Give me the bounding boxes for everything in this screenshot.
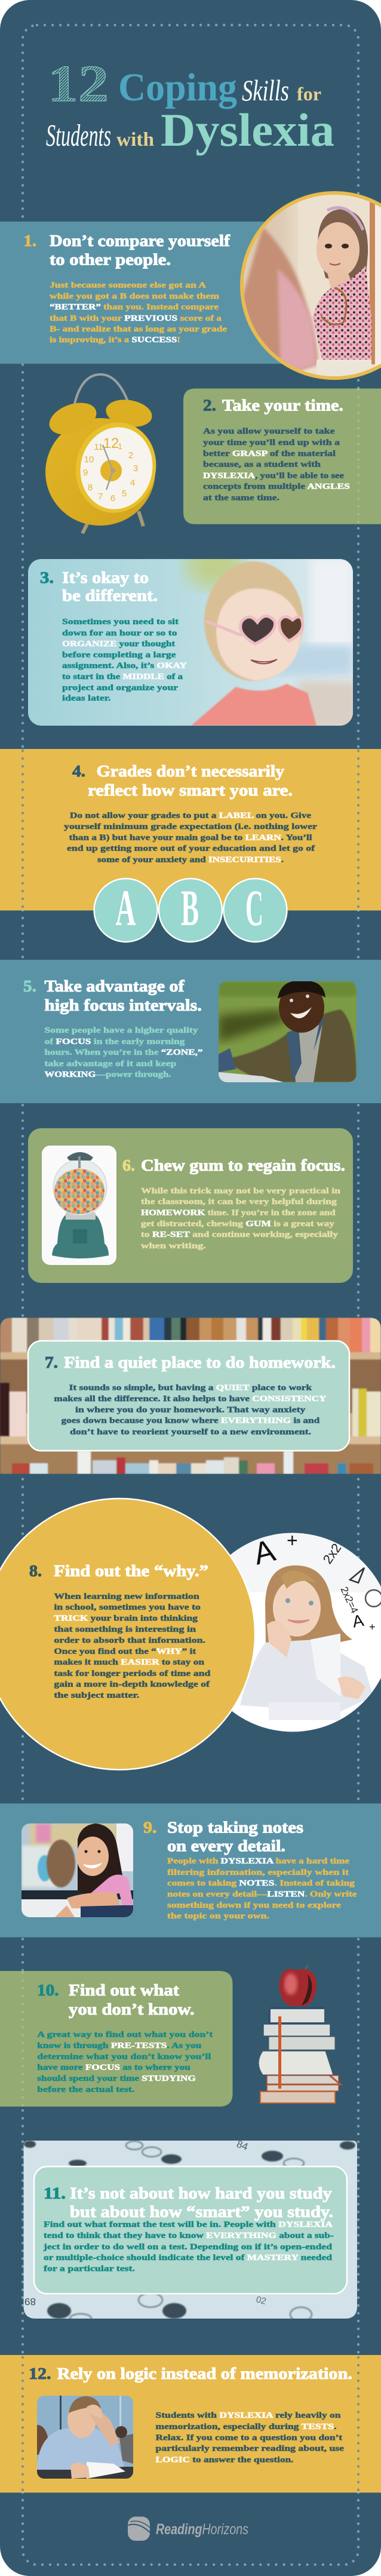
tip 11 heading: It’s not about how hard you study <box>70 2184 332 2202</box>
title <box>46 54 334 156</box>
tip 5 text: WORKING —power through. <box>44 1070 171 1079</box>
tip 12 heading: Rely on logic instead of memorization. <box>57 2365 352 2382</box>
tip 7 text: makes all the difference. It also helps to have CONSISTENCY <box>54 1394 327 1403</box>
tip 9 text: comes to taking NOTES . Instead of taking <box>167 1878 355 1887</box>
tip 7 card <box>28 1341 349 1451</box>
book stack <box>259 2007 340 2103</box>
clock numbers: 10 <box>84 455 94 465</box>
grade circle B <box>159 879 222 942</box>
panel: tip 6 <box>28 1128 353 1283</box>
tip 10 heading <box>69 1981 195 2018</box>
panel: tip 4 <box>0 749 381 942</box>
photo: boy taking a test <box>37 2396 133 2479</box>
tip 3 text: Sometimes you need to sit <box>62 617 179 626</box>
tip 5 heading: high focus intervals. <box>44 996 202 1014</box>
tip 4 text: some of your anxiety and INSECURITIES . <box>97 855 284 864</box>
tip 1 text: is improving, it’s a SUCCESS ! <box>50 335 180 344</box>
tip 2 text: DYSLEXIA , you’ll be able to see <box>203 471 344 480</box>
clock numbers: 9 <box>83 468 88 478</box>
title number 12: 12 <box>48 54 109 112</box>
sheet numbers: 02 <box>255 2294 267 2307</box>
tip 8 text: When learning new information <box>54 1592 199 1601</box>
tip 10 text <box>37 2030 213 2094</box>
clock numbers: 2 <box>128 450 133 460</box>
tip 12 text: particularly remember reading about, use <box>155 2444 344 2453</box>
tip 9 text: filtering information, especially when it <box>167 1868 349 1877</box>
tip 10 text: A great way to find out what you don’t <box>37 2030 213 2039</box>
tip 3 heading: It’s okay to <box>62 569 149 587</box>
panel: tip 9 <box>0 1804 381 1938</box>
tip 6 text: to RE-SET and continue working, especially <box>141 1230 338 1239</box>
title word with: with <box>116 129 154 151</box>
tip 7 text <box>54 1383 327 1436</box>
sheet numbers: 84 <box>235 2138 250 2153</box>
photo: smiling boy on grass <box>219 981 357 1082</box>
tip 1 text <box>50 281 227 344</box>
tip 11 number: 11. <box>44 2184 66 2202</box>
tip 11 text: tend to think that they have to know EVERYTHING about a sub- <box>44 2231 334 2240</box>
tip 6 text <box>141 1186 341 1250</box>
tip 4 heading: reflect how smart you are. <box>88 781 293 799</box>
tip 1 text: that B with your PREVIOUS score of a <box>50 314 222 323</box>
tip 8 text: in school, sometimes you have to <box>54 1602 201 1611</box>
tip 8 text: TRICK your brain into thinking <box>54 1614 198 1623</box>
doodle text: A <box>351 1611 365 1631</box>
tip 6 number: 6. <box>122 1156 135 1174</box>
tip 3 text: down for an hour or so to <box>62 628 177 637</box>
tip 2 text <box>203 426 350 502</box>
tip 6 text: get distracted, chewing GUM is a great way <box>141 1219 334 1228</box>
tip 7 text: in where you do your homework. That way anxiety <box>75 1405 306 1414</box>
tip 9 text: People with DYSLEXIA have a hard time <box>167 1856 349 1865</box>
tip 3 heading: be different. <box>62 587 158 604</box>
tip 2 text: at the same time. <box>203 493 279 502</box>
tip 11 text: ject in order to do well on a test. Depending on if it’s open-ended <box>43 2242 333 2251</box>
tip 8 text: Once you find out the “ WHY ” it <box>54 1647 196 1656</box>
clock numbers: 5 <box>122 489 127 499</box>
tip 4 text: yourself minimum grade expectation (i.e. nothing lower <box>64 822 317 831</box>
tip 6 heading: Chew gum to regain focus. <box>141 1156 345 1174</box>
tip 8 number: 8. <box>29 1562 42 1580</box>
tip 3 text: to start in the MIDDLE of a <box>62 672 183 681</box>
clock numbers: 11 <box>94 442 103 452</box>
logo: Reading Horizons <box>128 2517 248 2541</box>
title word Coping: Coping <box>118 66 237 109</box>
tip 5 heading <box>44 977 202 1014</box>
tip 3 text: assignment. Also, it’s OKAY <box>62 661 187 670</box>
tip 2 text: concepts from multiple ANGLES <box>203 482 350 491</box>
tip 3 text: before completing a large <box>62 650 176 659</box>
photo: answer sheet <box>24 2138 357 2323</box>
tip 9 heading: Stop taking notes <box>167 1818 303 1836</box>
icon: alarm clock <box>38 374 164 533</box>
tip 9 text: something down if you need to explore <box>167 1900 341 1909</box>
tip 7 text: It sounds so simple, but having a QUIET place to work <box>69 1383 312 1392</box>
logo wordmark: ReadingHorizons <box>156 2521 248 2538</box>
tip 7 text: don’t have to reorient yourself to a new environment. <box>70 1427 311 1436</box>
doodle text: + <box>369 1621 376 1633</box>
tip 4 heading <box>88 762 293 799</box>
tip 3 text <box>62 617 187 702</box>
tip 11 heading: but about how “smart” you study. <box>70 2203 333 2221</box>
panel: tip 3 <box>28 559 353 726</box>
sheet numbers <box>24 2138 267 2307</box>
tip 12 text: Relax. If you come to a question you don’t <box>155 2433 343 2442</box>
clock numbers: 6 <box>110 493 115 503</box>
tip 4 heading: Grades don’t necessarily <box>97 762 285 780</box>
tip 11 card <box>34 2166 347 2293</box>
tip 7 number: 7. <box>45 1353 58 1371</box>
panel: tip 5 <box>0 960 381 1103</box>
tip 8 text: makes it much EASIER to stay on <box>54 1657 205 1666</box>
tip 5 text: of FOCUS in the early morning <box>44 1037 185 1046</box>
tip 6 text: when writing. <box>141 1241 206 1250</box>
grade circle C <box>223 879 287 942</box>
tip 4 text: end up getting more out of your education and let go of <box>67 844 315 853</box>
tip 3 number: 3. <box>40 569 54 587</box>
tip 8 text: order to absorb that information. <box>54 1636 205 1645</box>
panel: tip 11 <box>24 2138 357 2323</box>
tip 3 heading <box>62 569 158 604</box>
tip 2 text: your time you’ll end up with a <box>203 438 340 447</box>
tip 10 text: determine what you don’t know you’ll <box>37 2052 211 2061</box>
tip 10 heading: Find out what <box>69 1981 179 1999</box>
tip 1 heading: to other people. <box>50 251 171 269</box>
title word Skills: Skills <box>242 73 289 107</box>
tip 11 text <box>43 2219 334 2273</box>
tip 1 heading <box>50 232 231 269</box>
tip 12 text: memorization, especially during TESTS . <box>155 2422 337 2431</box>
sheet numbers: 89 <box>24 2296 36 2307</box>
tip 2 text: As you allow yourself to take <box>203 426 335 435</box>
tip 10 heading: you don’t know. <box>69 2000 195 2018</box>
tip 9 text: the topic on your own. <box>167 1911 269 1920</box>
panel: tip 8 <box>0 1499 255 1770</box>
doodle text: A <box>250 1533 279 1572</box>
tip 11 text: for a particular test. <box>44 2264 135 2273</box>
tip 11 text: or multiple-choice should indicate the level of MASTERY needed <box>44 2253 333 2262</box>
clock numbers: 3 <box>133 463 138 474</box>
tip 10 text: know is through PRE-TESTS . As you <box>37 2041 202 2050</box>
tip 1 number: 1. <box>24 232 36 250</box>
tip 10 text: have more FOCUS as to where you <box>37 2062 190 2071</box>
tip 3 text: ORGANIZE your thought <box>62 639 176 648</box>
tip 8 text: task for longer periods of time and <box>54 1669 211 1678</box>
clock numbers: 4 <box>130 478 135 488</box>
icon: apple on stack of books <box>259 1965 340 2103</box>
photo: girl in classroom <box>21 1823 133 1917</box>
grade circle C: C <box>245 879 263 937</box>
tip 7 heading: Find a quiet place to do homework. <box>64 1353 336 1371</box>
tip 8 text: the subject matter. <box>54 1691 139 1700</box>
tip 8 text: that something is interesting in <box>54 1625 196 1634</box>
clock numbers: 8 <box>88 483 93 493</box>
grade circle A: A <box>116 879 136 937</box>
doodle text <box>257 1536 375 1629</box>
clock numbers: 7 <box>98 492 103 502</box>
tip 3 text: project and organize your <box>62 683 178 692</box>
tip 6 text: While this trick may not be very practical in <box>141 1186 341 1195</box>
panel: tip 2 <box>183 388 381 524</box>
tip 9 heading <box>167 1818 303 1855</box>
photo: girl with A+ doodles <box>231 1533 381 1732</box>
tip 10 number: 10. <box>37 1981 59 1999</box>
tip 4 text: Do not allow your grades to put a LABEL on you. Give <box>70 810 311 819</box>
tip 12 text <box>155 2411 344 2464</box>
grade circle B: B <box>181 879 199 937</box>
doodle text: + <box>287 1530 298 1551</box>
tip 9 heading: on every detail. <box>167 1837 285 1855</box>
tip 2 heading: Take your time. <box>222 397 343 415</box>
tip 1 text: while you got a B does not make them <box>50 291 220 300</box>
photo: gumball machine <box>42 1146 116 1265</box>
title word Students: Students <box>46 119 111 153</box>
tip 8 text: gain a more in-depth knowledge of <box>54 1680 210 1688</box>
panel: tip 10 <box>0 1971 233 2107</box>
tip 12 text: Students with DYSLEXIA rely heavily on <box>155 2411 341 2420</box>
tip 1 heading: Don’t compare yourself <box>50 232 231 250</box>
tip 5 text: Some people have a higher quality <box>44 1026 198 1034</box>
panel: tip 12 <box>0 2355 381 2492</box>
tip 8 heading: Find out the “why.” <box>54 1562 208 1580</box>
title word for: for <box>297 83 321 105</box>
tip 9 number: 9. <box>143 1818 156 1836</box>
tip 9 text: notes on every detail— LISTEN . Only write <box>167 1890 357 1899</box>
tip 5 number: 5. <box>23 977 36 995</box>
doodle text: 2x2 <box>320 1540 344 1567</box>
tip 5 heading: Take advantage of <box>44 977 185 995</box>
clock numbers <box>83 435 138 503</box>
tip 1 text: “BETTER” than you. Instead compare <box>50 302 219 311</box>
tip 5 text: take advantage of it and keep <box>44 1059 177 1068</box>
tip 6 text: the classroom, it can be very helpful during <box>141 1197 337 1206</box>
tip 2 number: 2. <box>203 397 216 415</box>
tip 4 text <box>64 810 317 864</box>
tip 10 text: should spend your time STUDYING <box>37 2074 196 2083</box>
tip 8 text <box>54 1592 211 1700</box>
tip 9 text <box>167 1856 357 1920</box>
tip 1 text: Just because someone else got an A <box>50 281 206 289</box>
tip 12 text: LOGIC to answer the question. <box>155 2455 294 2464</box>
tip 1 text: B- and realize that as long as your grade <box>50 324 227 333</box>
tip 6 text: HOMEWORK time. If you’re in the zone and <box>141 1208 336 1217</box>
tip 7 text: goes down because you know where EVERYTHING is and <box>62 1416 320 1425</box>
photo: girl with heart sunglasses <box>179 559 353 726</box>
panel: tip 7 <box>0 1318 381 1474</box>
panel: tip 1 <box>0 191 381 382</box>
grade circle A <box>94 879 158 942</box>
photo: girl at a mirror <box>239 191 381 382</box>
logo mark <box>128 2517 150 2541</box>
tip 10 text: before the actual test. <box>37 2084 134 2094</box>
doodle text: 2x2=4 <box>338 1585 360 1615</box>
tip 12 number: 12. <box>29 2365 51 2382</box>
tip 5 text <box>44 1026 203 1079</box>
tip 2 text: because, as a student with <box>203 460 321 468</box>
clock numbers: 12 <box>103 435 119 452</box>
clock numbers: 1 <box>118 441 122 451</box>
tip 5 text: hours. When you’re in the “ZONE,” <box>44 1048 203 1057</box>
photo: bookshelf <box>0 1318 381 1474</box>
title word Dyslexia: Dyslexia <box>161 104 334 156</box>
tip 4 number: 4. <box>72 762 85 780</box>
tip 3 text: ideas later. <box>62 693 111 702</box>
tip 2 text: better GRASP of the material <box>203 449 336 458</box>
tip 11 heading <box>70 2184 333 2221</box>
tip 4 text: than a B) but have your main goal be to LEARN . You’ll <box>69 833 312 842</box>
tip 11 text: Find out what format the test will be in. People with DYSLEXIA <box>44 2219 333 2229</box>
